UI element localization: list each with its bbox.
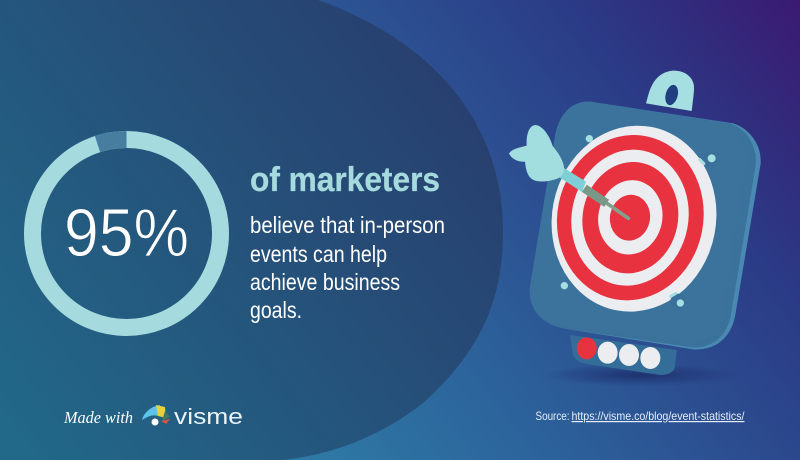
icon: dartboard illustration	[509, 71, 761, 386]
panel: dark left blob	[0, 0, 503, 460]
source citation: https://visme.co/blog/event-statistics/	[572, 409, 745, 423]
donut chart: 95%	[32, 140, 220, 328]
board front	[530, 102, 747, 343]
mounting clips	[561, 135, 717, 310]
bottom tray	[570, 335, 677, 375]
text block: description	[250, 212, 445, 323]
heading: of marketers	[250, 161, 440, 199]
ground shadow	[543, 364, 737, 386]
logo: Made with visme	[63, 404, 243, 429]
target rings	[536, 111, 732, 326]
text block: description: goals.	[250, 297, 302, 323]
logo: Made with visme: visme	[174, 404, 243, 429]
big number: 95%	[64, 195, 189, 271]
text block: description: believe that in-person	[250, 212, 445, 238]
board middle layer	[530, 102, 756, 347]
board back layer	[530, 102, 761, 349]
score dots	[577, 337, 660, 369]
hanging tab	[646, 71, 694, 111]
remaining 5% arc	[98, 140, 126, 144]
text block: description: events can help	[250, 241, 387, 267]
logo mark	[142, 405, 170, 426]
text block: description: achieve business	[250, 269, 400, 295]
logo: Made with visme: Made with	[63, 408, 133, 427]
dart	[509, 125, 628, 218]
source citation: Source:	[536, 409, 570, 423]
